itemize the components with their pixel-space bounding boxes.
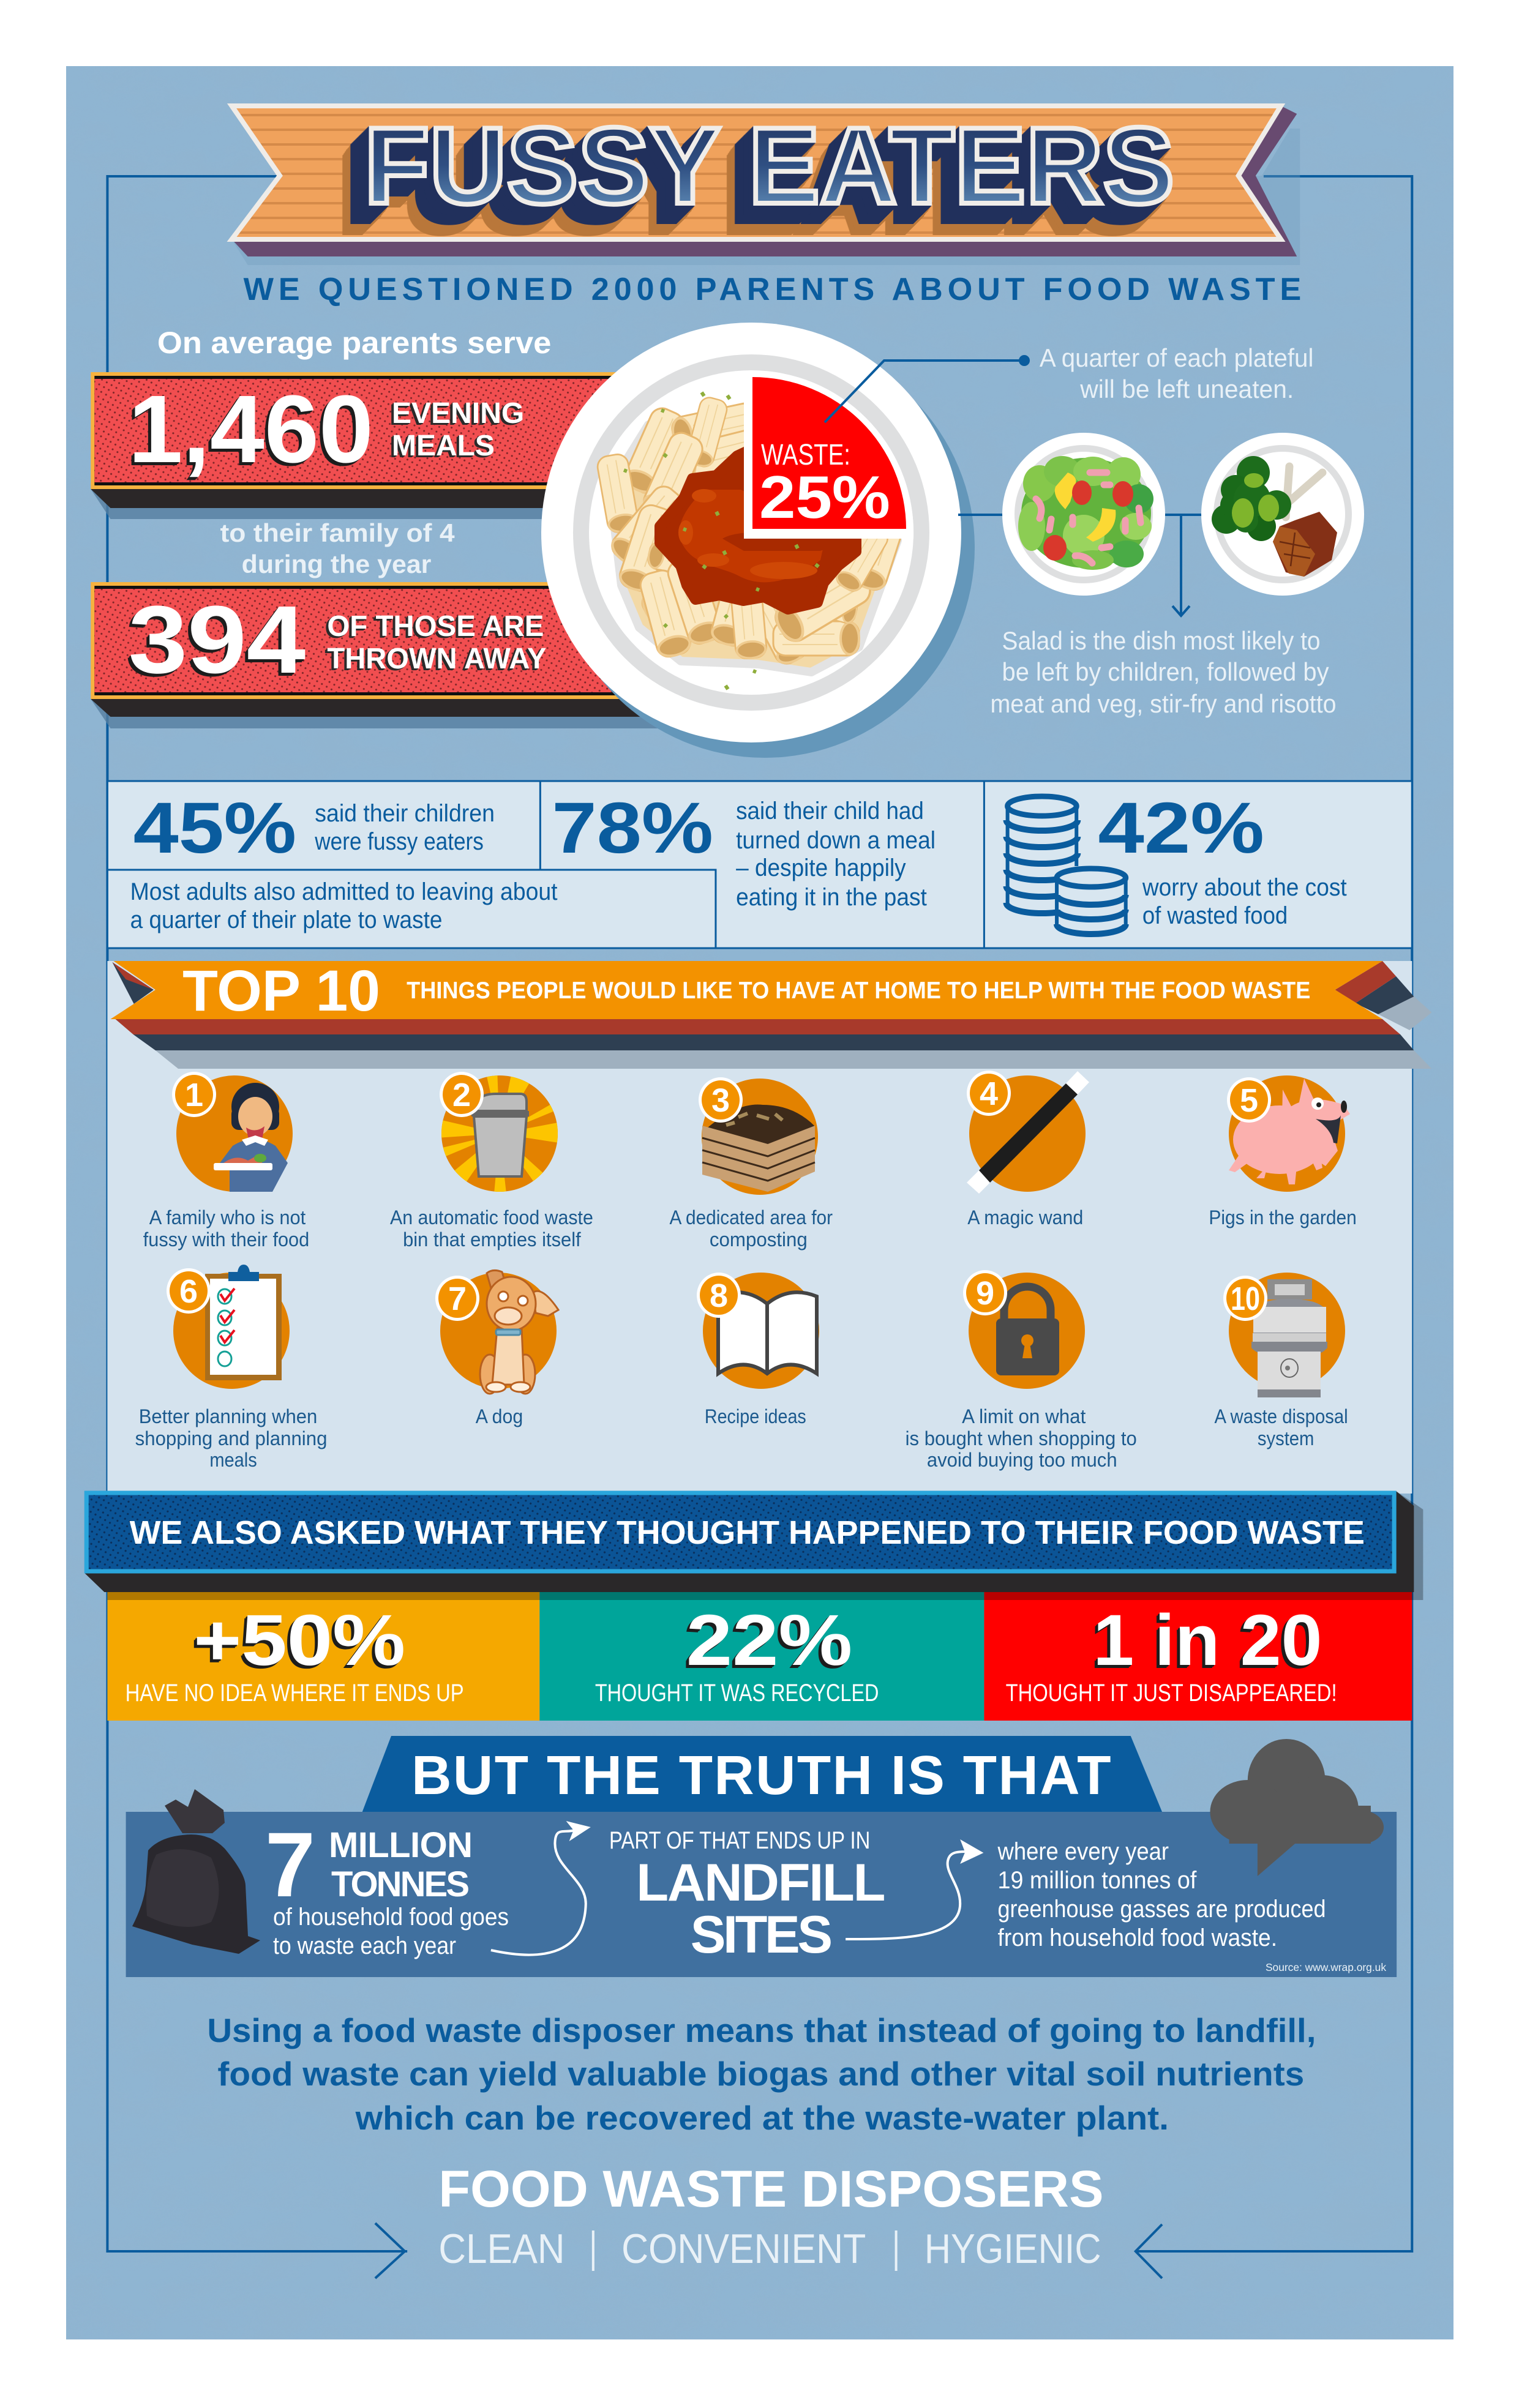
stat: 78% xyxy=(552,788,936,911)
meat plate xyxy=(1201,433,1364,596)
connector lines and arrow xyxy=(958,515,1225,616)
connecting text: during the year xyxy=(242,550,431,578)
badge xyxy=(440,1072,484,1117)
callout line xyxy=(825,355,1030,422)
caption: is bought when shopping to xyxy=(906,1427,1137,1449)
badge: 7 xyxy=(448,1281,467,1317)
title: FUSSY EATERS xyxy=(364,104,1174,226)
label: THOUGHT IT JUST DISAPPEARED! xyxy=(1006,1680,1337,1707)
red box: 394 thrown away xyxy=(91,582,738,728)
icon: wand xyxy=(967,1071,1089,1194)
salad text: Salad is the dish most likely to xyxy=(1002,626,1320,655)
connecting text: to their family of 4 xyxy=(220,518,455,547)
caption: Better planning when xyxy=(139,1405,317,1427)
footer tagline: HYGIENIC xyxy=(925,2226,1101,2272)
caption: system xyxy=(1258,1427,1314,1449)
waste wedge xyxy=(744,371,913,539)
icon: compost crate xyxy=(702,1104,815,1192)
stat: 78%: eating it in the past xyxy=(736,884,927,911)
caption xyxy=(143,1206,309,1251)
item 6: planning xyxy=(135,1265,327,1471)
badge xyxy=(697,1273,741,1318)
source: Source: www.wrap.org.uk xyxy=(1266,1961,1387,1973)
icon: bin bag xyxy=(132,1789,260,1954)
badge xyxy=(167,1268,211,1314)
text: landfill sites xyxy=(609,1827,885,1964)
caption: composting xyxy=(710,1228,808,1251)
badge xyxy=(963,1270,1007,1315)
salad xyxy=(1018,456,1153,570)
paragraph: which can be recovered at the waste-water plant. xyxy=(355,2099,1169,2137)
badge xyxy=(1223,1276,1267,1321)
stat: 7 million tonnes: to waste each year xyxy=(273,1932,456,1959)
figure: 394 xyxy=(129,586,306,694)
caption: A waste disposal xyxy=(1214,1405,1348,1427)
stat: 78%: 78% xyxy=(552,788,713,869)
text: greenhouse gases: greenhouse gasses are produced xyxy=(998,1896,1326,1923)
label: MEALS xyxy=(392,429,495,462)
caption xyxy=(135,1405,327,1471)
red box: 1,460 evening meals xyxy=(91,372,689,519)
label: HAVE NO IDEA WHERE IT ENDS UP xyxy=(126,1680,464,1707)
item 10: waste disposal xyxy=(1214,1273,1348,1449)
salad text: be left by children, followed by xyxy=(1002,657,1329,686)
heading: but the truth: BUT THE TRUTH IS THAT xyxy=(411,1744,1111,1806)
broccoli and lamb xyxy=(1212,456,1337,577)
footer heading: FOOD WASTE DISPOSERS xyxy=(438,2160,1103,2218)
footer tagline: CONVENIENT xyxy=(621,2226,866,2272)
text: adults: a quarter of their plate to waste xyxy=(130,907,442,933)
badge: 8 xyxy=(710,1277,728,1314)
stat: 78%: – despite happily xyxy=(736,854,906,881)
icon: dog xyxy=(480,1270,558,1394)
stat: 45%: said their children xyxy=(315,800,495,827)
icon: coins xyxy=(1007,796,1126,937)
stat bar: 22% xyxy=(539,1592,984,1721)
intro text: On average parents serve xyxy=(157,326,551,360)
label: OF THOSE ARE xyxy=(327,610,544,643)
label: THROWN AWAY xyxy=(327,642,546,675)
figure: 1,460 xyxy=(129,375,373,483)
icon: sunburst xyxy=(441,1075,558,1192)
item 8: recipe ideas xyxy=(697,1273,819,1427)
banner: what happened xyxy=(84,1491,1423,1600)
icon: clipboard xyxy=(205,1265,282,1380)
text: greenhouse gases: from household food waste. xyxy=(998,1924,1277,1951)
caption: fussy with their food xyxy=(143,1228,309,1251)
badge xyxy=(699,1077,743,1123)
icon: bin xyxy=(471,1094,529,1176)
stat: 78%: said their child had xyxy=(736,798,924,824)
caption: An automatic food waste xyxy=(390,1206,593,1228)
caption xyxy=(390,1206,593,1251)
icon: pig xyxy=(1229,1079,1350,1184)
item 5: pigs xyxy=(1209,1075,1357,1228)
caption: meals xyxy=(209,1449,257,1471)
badge: 5 xyxy=(1240,1082,1258,1119)
text: greenhouse gases: where every year xyxy=(997,1838,1169,1865)
badge: 6 xyxy=(179,1273,198,1310)
stat: 45%: were fussy eaters xyxy=(314,828,484,855)
badge: 4 xyxy=(980,1075,998,1112)
callout text xyxy=(1040,343,1313,403)
caption: bin that empties itself xyxy=(403,1228,581,1251)
badge: 3 xyxy=(711,1082,730,1119)
label: THOUGHT IT WAS RECYCLED xyxy=(595,1680,879,1707)
caption: A limit on what xyxy=(962,1405,1086,1427)
arrow: to landfill xyxy=(491,1821,591,1955)
banner: title ribbon xyxy=(232,104,1300,265)
salad plate xyxy=(1002,433,1165,596)
item 1: family xyxy=(143,1072,309,1251)
percentage: 25% xyxy=(759,463,890,531)
panel: landfill xyxy=(126,1812,1397,1977)
stat: 45% xyxy=(133,788,495,869)
banner: top 10 ribbon xyxy=(110,959,1431,1069)
caption xyxy=(906,1405,1137,1471)
caption: shopping and planning xyxy=(135,1427,327,1449)
icon: disposer xyxy=(1251,1279,1327,1397)
subtitle: WE QUESTIONED 2000 PARENTS ABOUT FOOD WASTE xyxy=(244,272,1301,307)
item 3: composting xyxy=(670,1077,833,1251)
caption: A magic wand xyxy=(967,1206,1083,1228)
subheading: THINGS PEOPLE WOULD LIKE TO HAVE AT HOME TO HELP WITH THE FOOD WASTE xyxy=(407,978,1310,1004)
stat bar: +50% xyxy=(107,1592,539,1721)
badge xyxy=(967,1071,1011,1116)
arrow: to greenhouse gas xyxy=(846,1839,983,1939)
frame line xyxy=(107,176,1412,2251)
paragraph: Using a food waste disposer means that instead of going to landfill, xyxy=(207,2011,1316,2049)
caption: Recipe ideas xyxy=(705,1405,806,1427)
icon: cloud xyxy=(1210,1739,1384,1876)
caption: A family who is not xyxy=(149,1206,306,1228)
caption: Pigs in the garden xyxy=(1209,1206,1357,1228)
stat: 7 million tonnes: 7 xyxy=(265,1813,315,1916)
figure: 1 in 20 xyxy=(1093,1600,1322,1681)
arrows: footer xyxy=(375,2223,1162,2278)
item 7: dog xyxy=(435,1270,558,1427)
label: EVENING xyxy=(392,397,524,430)
item 4: magic wand xyxy=(967,1071,1089,1228)
caption: avoid buying too much xyxy=(927,1449,1117,1471)
caption: A dedicated area for xyxy=(670,1206,833,1228)
stat: 7 million tonnes: TONNES xyxy=(331,1864,470,1904)
stat: 42%: worry about the cost xyxy=(1142,874,1347,901)
stat: 45%: 45% xyxy=(133,788,296,869)
stat: 42%: 42% xyxy=(1098,788,1264,869)
badge xyxy=(435,1276,479,1321)
text: adults: Most adults also admitted to leaving about xyxy=(130,878,558,905)
text: landfill sites: SITES xyxy=(691,1905,833,1964)
stat: 7 million tonnes xyxy=(265,1813,509,1959)
badge: 9 xyxy=(976,1275,994,1312)
stat: 7 million tonnes: of household food goes xyxy=(273,1904,509,1931)
footer tagline xyxy=(438,2226,1101,2272)
stat: 78%: turned down a meal xyxy=(736,827,936,854)
caption xyxy=(1214,1405,1348,1449)
text: greenhouse gases: 19 million tonnes of xyxy=(998,1867,1197,1894)
badge xyxy=(1227,1077,1271,1123)
icon: woman xyxy=(214,1083,288,1192)
label xyxy=(392,397,524,462)
pasta xyxy=(596,395,909,672)
paragraph xyxy=(207,2011,1316,2137)
heading: TOP 10 xyxy=(182,959,380,1023)
connecting text xyxy=(220,518,455,578)
text: landfill sites: PART OF THAT ENDS UP IN xyxy=(609,1827,870,1854)
figure: +50% xyxy=(193,1600,405,1681)
callout text: will be left uneaten. xyxy=(1079,375,1294,403)
panel: statistics xyxy=(107,781,1412,948)
stat: 42% xyxy=(1098,788,1347,929)
badge: 2 xyxy=(452,1077,471,1113)
figure: 22% xyxy=(686,1600,852,1681)
text: adults xyxy=(130,878,558,933)
icon: padlock xyxy=(996,1287,1059,1375)
footer tagline: CLEAN xyxy=(438,2226,565,2272)
text: landfill sites: LANDFILL xyxy=(636,1853,885,1912)
salad text: meat and veg, stir-fry and risotto xyxy=(990,689,1337,718)
caption xyxy=(670,1206,833,1251)
icon: book xyxy=(718,1292,817,1374)
badge: 10 xyxy=(1231,1281,1260,1317)
caption: A dog xyxy=(476,1405,523,1427)
plate with pasta xyxy=(541,323,975,758)
callout text: A quarter of each plateful xyxy=(1040,343,1313,372)
stat: 7 million tonnes: MILLION xyxy=(329,1825,473,1865)
badge xyxy=(172,1072,216,1117)
salad text xyxy=(990,626,1337,718)
badge: 1 xyxy=(185,1077,203,1113)
sauce xyxy=(660,428,856,609)
item 9: limit xyxy=(906,1270,1137,1471)
herbs xyxy=(624,392,819,689)
item 2: automatic bin xyxy=(390,1065,593,1251)
label xyxy=(327,610,546,675)
text: greenhouse gases xyxy=(997,1838,1326,1951)
panel: top 10 background xyxy=(107,961,1412,1494)
label: WASTE: xyxy=(761,439,850,471)
paragraph: food waste can yield valuable biogas and other vital soil nutrients xyxy=(217,2055,1304,2093)
stat bar: 1 in 20 xyxy=(984,1592,1412,1721)
heading: WE ALSO ASKED WHAT THEY THOUGHT HAPPENED TO THEIR FOOD WASTE xyxy=(130,1514,1365,1551)
stat: 42%: of wasted food xyxy=(1142,902,1288,929)
